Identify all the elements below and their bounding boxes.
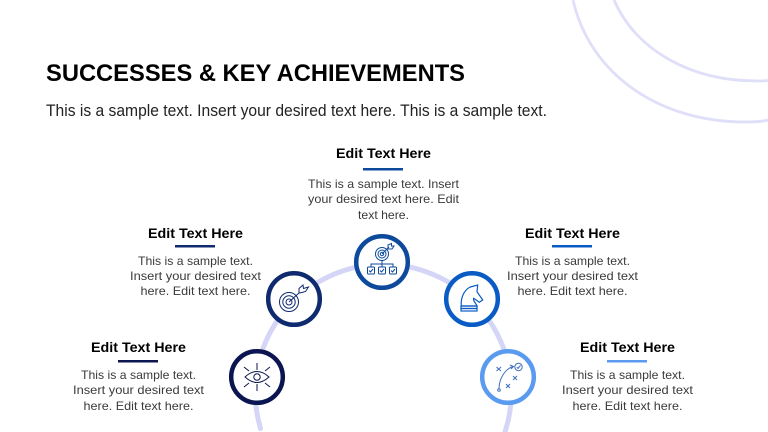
body text: This is a sample text. [570,368,685,382]
body text: here. Edit text here. [572,399,682,413]
body text [507,254,639,298]
panel: lower-left item text [73,340,205,413]
heading: Edit Text Here [336,146,432,161]
heading: Edit Text Here [580,340,676,355]
body text: here. Edit text here. [84,399,194,413]
icon: play strategy [482,351,534,403]
body text [308,177,460,222]
body text [73,368,205,413]
title: SUCCESSES & KEY ACHIEVEMENTS [46,60,465,87]
semicircular arc connector [255,264,511,432]
heading: Edit Text Here [148,226,244,241]
body text [562,368,694,413]
icon: chess knight [446,273,498,325]
body text: Insert your desired text [562,383,694,397]
body text: Insert your desired text [130,269,262,283]
panel: upper-right item text [507,226,639,298]
body text: text here. [358,208,409,222]
body text: Insert your desired text [507,269,639,283]
body text: here. Edit text here. [518,284,628,298]
body text: This is a sample text. [138,254,253,268]
panel: upper-left item text [130,226,262,298]
body text [130,254,262,298]
body text: This is a sample text. Insert [308,177,460,191]
icon: eye [231,351,283,403]
icon: target with hierarchy [356,236,408,288]
panel: lower-right item text [562,340,694,413]
body text: Insert your desired text [73,383,205,397]
heading: Edit Text Here [525,226,621,241]
body text: This is a sample text. [515,254,630,268]
subtitle: This is a sample text. Insert your desired text here. This is a sample text. [46,102,547,120]
icon: target with arrow [268,273,320,325]
body text: here. Edit text here. [140,284,250,298]
body text: This is a sample text. [81,368,196,382]
body text: your desired text here. Edit [308,192,460,206]
heading: Edit Text Here [91,340,187,355]
panel: top item text [308,146,460,222]
